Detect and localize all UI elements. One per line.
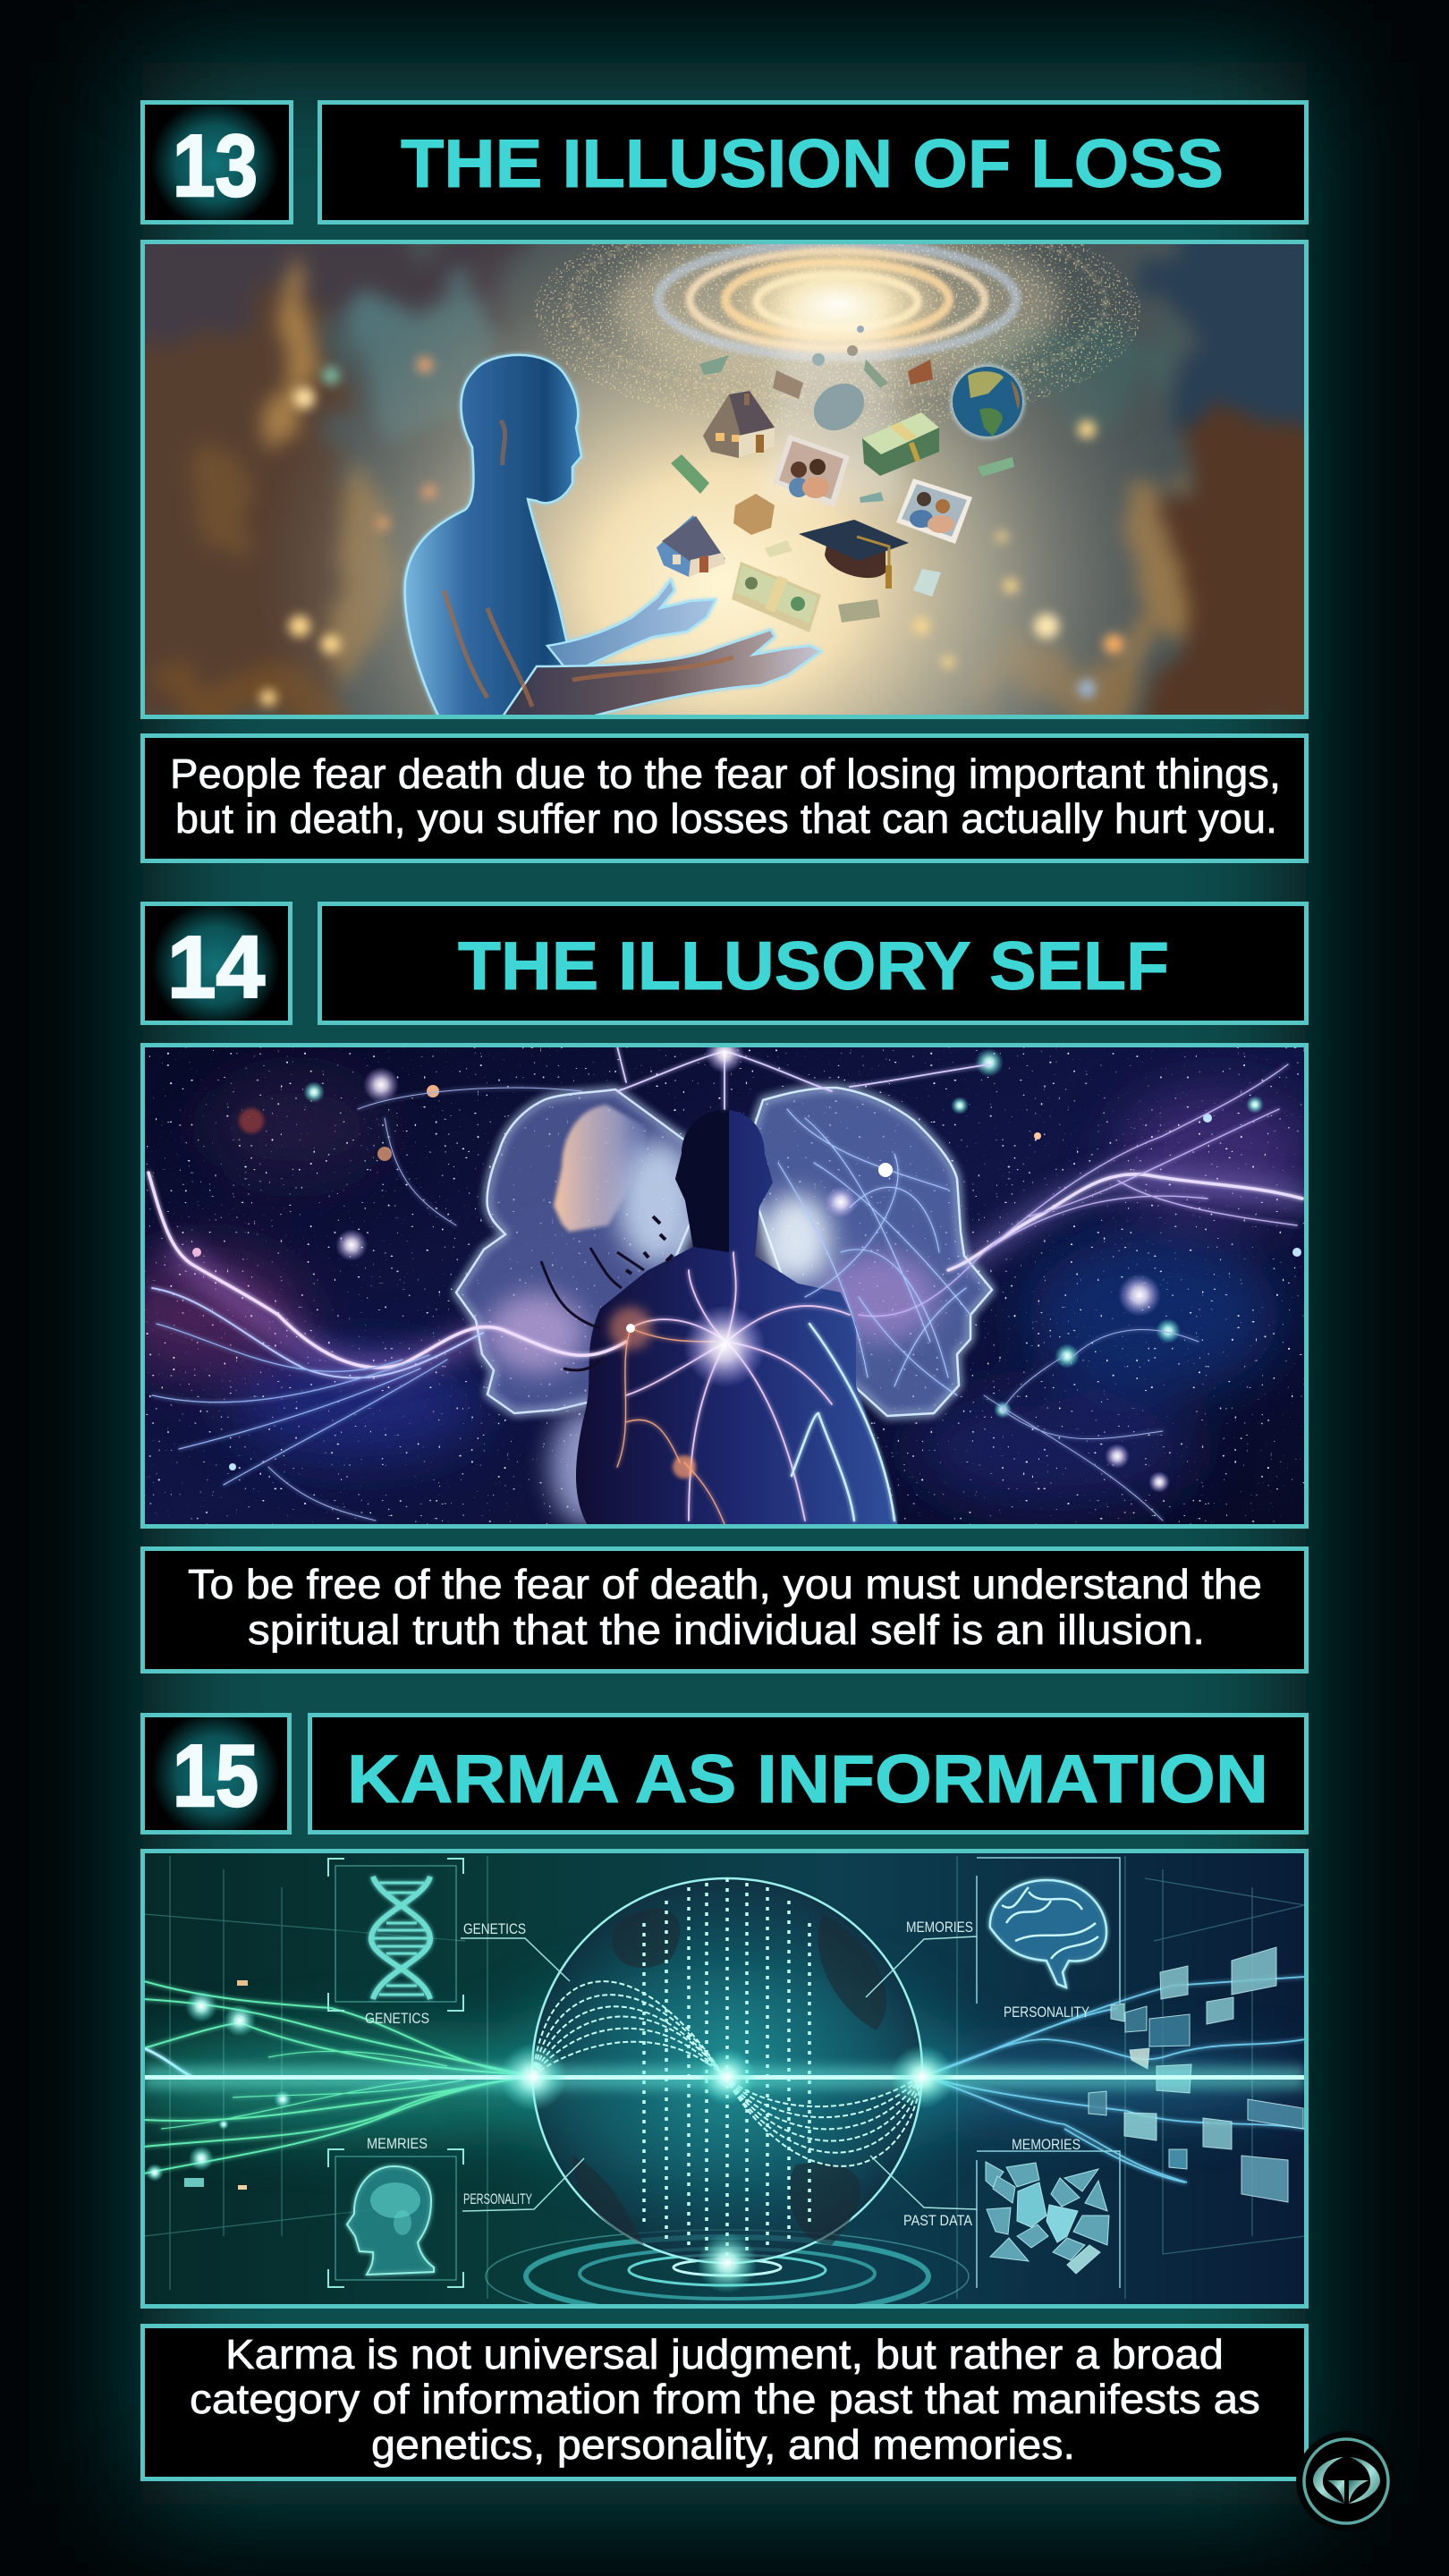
data sphere: [532, 1878, 922, 2263]
description 15: category of information from the past that manifests as: [190, 2376, 1260, 2422]
illustration: figure watching possessions dissolve into a galaxy: [140, 240, 1309, 719]
glowing stream nodes: [146, 1980, 292, 2190]
description 14: [143, 1549, 1306, 1671]
glowing hearts of light: [609, 1034, 893, 1479]
number badge 14: [143, 903, 290, 1023]
title 15: [309, 1716, 1306, 1832]
callout leader lines: [461, 1936, 977, 2211]
galaxy: [533, 244, 1141, 506]
callout labels: MEMRIES: [367, 2135, 428, 2152]
logo emblem: [1296, 2431, 1396, 2531]
title 15: KARMA AS INFORMATION: [347, 1741, 1268, 1818]
blue house: [657, 515, 725, 577]
number badge 13: 13: [173, 116, 258, 215]
illustration: dissolving self among neural galaxy: [107, 1034, 1315, 1530]
callout labels: MEMORIES: [1012, 2136, 1080, 2153]
callout labels: PERSONALITY: [463, 2190, 532, 2207]
panel: head with glowing brain: [328, 2149, 463, 2287]
panel: shattered memory fragments: [977, 2151, 1120, 2288]
title 14: THE ILLUSORY SELF: [458, 928, 1169, 1004]
number badge 13: [143, 102, 292, 222]
section 13: the illusion of loss: [89, 102, 1360, 860]
number badge 15: 15: [173, 1726, 258, 1825]
floating data screens: [1089, 1947, 1303, 2202]
illustration: data sphere with genetics, memories and personality panels: [116, 1852, 1306, 2323]
section 15: karma as information: [116, 1716, 1306, 2479]
callout labels: GENETICS: [365, 2010, 429, 2027]
light behind the central head: [487, 1140, 939, 1525]
small debris and banknotes: [671, 326, 1014, 623]
nebula haze: [107, 1073, 1315, 1512]
cash stack: [862, 412, 939, 476]
graduation cap: [799, 520, 909, 589]
floating lost possessions: [657, 326, 1025, 632]
number badge 15: [143, 1716, 290, 1832]
house: [703, 391, 775, 458]
glowing blue figure: [405, 355, 821, 719]
left green data streams: [144, 1981, 528, 2174]
pale ghost face: [554, 1105, 646, 1232]
horizontal light beam: [144, 2043, 1305, 2293]
photo: [773, 435, 850, 507]
bright stars: [192, 1048, 1301, 1493]
callout labels: MEMORIES: [906, 1919, 973, 1936]
transparent left head: [456, 1089, 716, 1413]
bokeh lights: [260, 357, 1123, 706]
description 14: To be free of the fear of death, you must understand the: [188, 1561, 1262, 1607]
central light band: [116, 1968, 1306, 2182]
title 13: THE ILLUSION OF LOSS: [401, 126, 1224, 202]
description 15: [143, 2326, 1306, 2479]
description 13: [143, 735, 1306, 860]
description 13: People fear death due to the fear of losing important things,: [170, 750, 1281, 797]
callout labels: [365, 1919, 1089, 2229]
energy streams and filaments: [148, 1046, 1302, 1524]
binary data columns: [644, 1878, 809, 2263]
globe: [950, 364, 1025, 439]
title 13: [320, 102, 1306, 222]
description 15: genetics, personality, and memories.: [371, 2421, 1075, 2468]
crumbling branches: [541, 1216, 673, 1370]
description 13: but in death, you suffer no losses that can actually hurt you.: [175, 795, 1277, 842]
photo: [896, 479, 972, 544]
right blue data streams: [926, 1977, 1305, 2182]
callout labels: GENETICS: [463, 1920, 526, 1937]
title 14: [320, 903, 1306, 1023]
star field: [144, 1046, 1305, 1525]
description 15: Karma is not universal judgment, but rather a broad: [225, 2331, 1224, 2377]
soft filament glow beneath the streams: [179, 1178, 1302, 1368]
transparent right head: [742, 1088, 992, 1416]
nebula clouds: [145, 244, 1304, 715]
callout labels: PAST DATA: [903, 2212, 973, 2229]
description 14: spiritual truth that the individual self is an illusion.: [248, 1606, 1205, 1653]
cash stack: [732, 562, 821, 632]
number badge 14: 14: [167, 918, 265, 1016]
callout labels: PERSONALITY: [1004, 2004, 1089, 2021]
central dark figure: [576, 1110, 899, 1530]
faint grid lines: [144, 1856, 1305, 2299]
panel: genetics DNA helix: [328, 1859, 463, 2011]
wave contour lines: [533, 1981, 922, 2166]
panel: glowing brain: [977, 1858, 1120, 2004]
section 14: the illusory self: [107, 903, 1315, 1671]
base platform rings: [486, 2230, 969, 2323]
